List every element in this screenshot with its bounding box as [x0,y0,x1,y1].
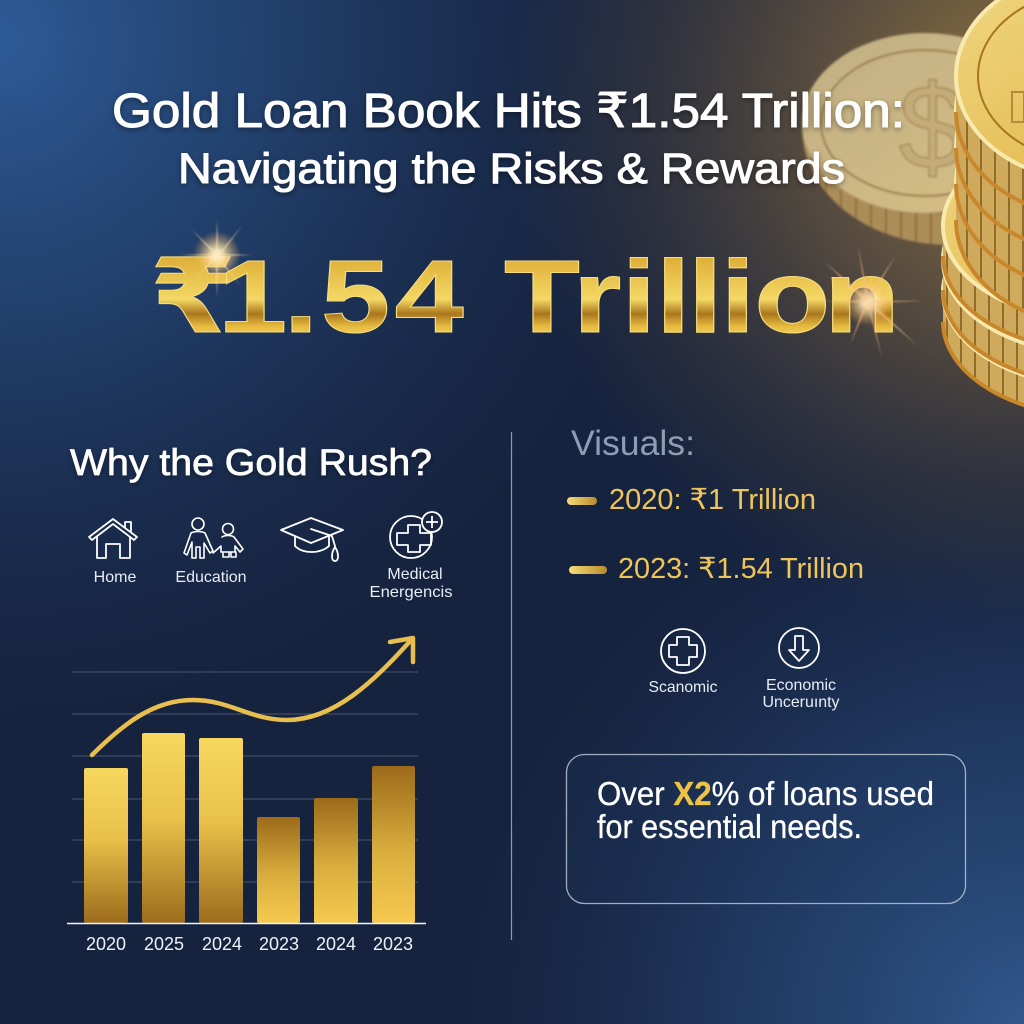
heading: Why the Gold Rush?: Why the Gold Rush? [70,442,432,483]
icon: home [89,519,137,558]
label: Medical Emergencies: Medical [387,566,443,583]
callout: Over X2% of loans used [597,775,934,812]
callout [566,754,966,904]
icon: stack of gold coins [943,0,1024,417]
icon: family [184,518,243,558]
bar: 2020 [84,768,128,923]
heading: Visuals: Visuals: [571,424,695,463]
icon: blurred background coin [802,33,1024,245]
label: Scanomic: Scanomic [648,679,718,696]
label: Economic Uncertainty: Unceruınty [762,694,840,711]
icon: medical cross with plus badge [390,512,442,558]
label: Home: Home [94,569,136,586]
x-axis year labels: 2023 [259,934,299,954]
title [112,85,905,193]
icon: down arrow circle [779,628,819,668]
legend row: 2023: 2023: ₹1.54 Trillion [618,553,864,585]
icon: plus circle [661,629,705,673]
headline figure: ₹1.54 Trillion [150,240,900,355]
headline figure: ₹1.54 Trillion: Trillion [504,240,900,355]
label: Economic Uncertainty [762,677,840,711]
bar chart [67,638,426,954]
x-axis year labels: 2023 [373,934,413,954]
bar: 2023 [257,817,300,923]
label: Education: Education [175,569,247,586]
bar: 2023 second [372,766,415,923]
trend arrow [92,638,413,755]
x-axis year labels: 2020 [86,934,126,954]
label: Medical Emergencies: Energencis [370,584,452,601]
title: Gold Loan Book Hits ₹1.54 Trillion: [112,85,905,138]
icon: blurred background coin: $ [899,60,965,194]
bar: 2025 [142,733,185,923]
x-axis year labels: 2025 [144,934,184,954]
x-axis year labels [86,934,413,954]
x-axis year labels: 2024 [316,934,356,954]
label: Economic Uncertainty: Economic [766,677,836,694]
icon: sparkle on n [822,245,925,358]
bar: 2024 second [314,798,358,923]
divider [510,432,512,940]
bar: 2024 [199,738,243,923]
icon: sparkle on rupee [180,220,252,298]
title: Navigating the Risks & Rewards [178,145,845,193]
x-axis year labels: 2024 [202,934,242,954]
callout: for essential needs. [597,808,862,845]
headline figure: ₹1.54 Trillion: ₹1.54 [150,240,464,355]
legend row: 2020: 2020: ₹1 Trillion [609,484,816,516]
label: Medical Emergencies [370,566,452,601]
icon: graduation cap [281,518,343,561]
